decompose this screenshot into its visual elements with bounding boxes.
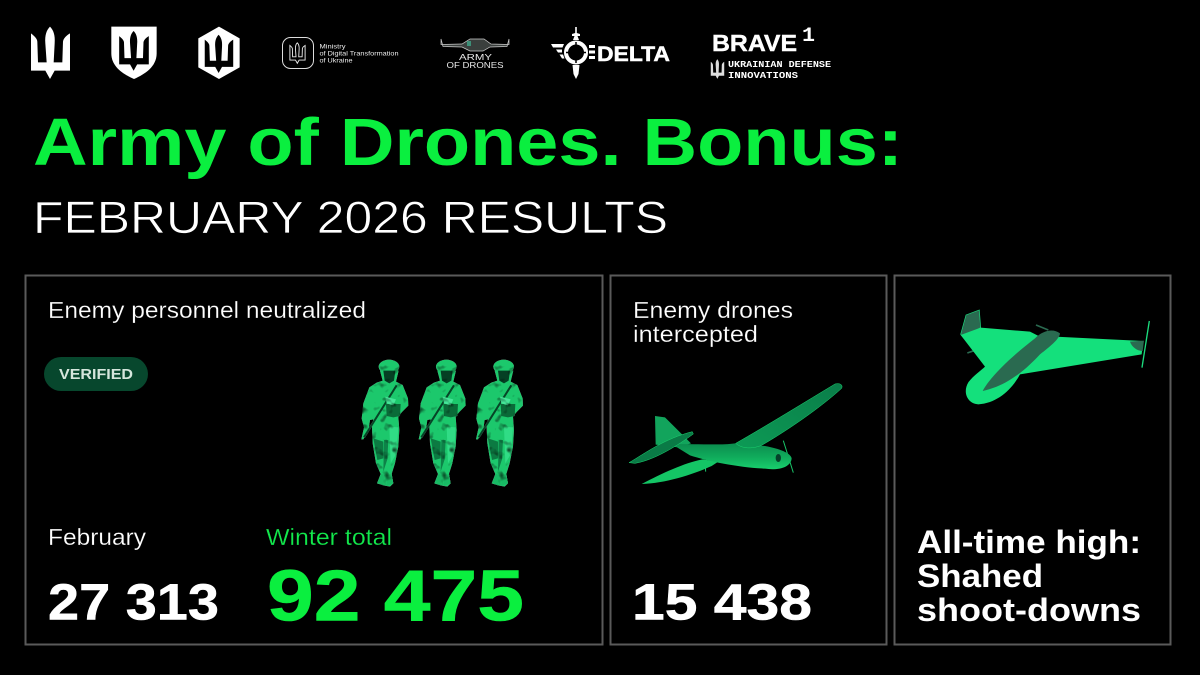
value: February: 27 313 [48,574,219,630]
heading: enemy personnel neutralized: Enemy personnel neutralized [48,297,366,323]
heading: enemy drones intercepted [633,297,793,347]
logo: Brave1: UKRAINIAN DEFENSE [728,59,831,70]
logo: Army of Drones [441,39,509,70]
logo: Brave1: BRAVE [712,30,797,56]
panel: Shahed shoot-downs [894,276,1170,644]
heading: enemy drones intercepted: intercepted [633,321,758,347]
logo: Ministry of Digital Transformation: of Digital Transformation [320,50,399,58]
logo: Brave1 [711,25,831,81]
logo: Brave1: INNOVATIONS [728,70,798,81]
callout: all-time high: All-time high: [917,524,1141,560]
illustration: Shahed drone [961,310,1149,404]
logo: Delta [551,27,670,79]
title: Army of Drones. Bonus: [33,105,903,180]
label: February: February [48,524,147,550]
logo: Delta: DELTA [597,43,670,66]
subtitle: FEBRUARY 2026 RESULTS [33,192,668,243]
panel: enemy drones [610,276,886,644]
logo: hexagon trident [198,27,240,79]
logo: Army of Drones: ARMY [459,52,492,62]
logo: Brave1: 1 [802,25,815,48]
illustration: reconnaissance drone [629,384,842,484]
badge: verified: VERIFIED [59,366,133,383]
callout: all-time high: shoot-downs [917,592,1141,628]
label: Winter total: Winter total [266,524,392,550]
logo: Ministry of Digital Transformation: of Ukraine [320,58,353,64]
heading: enemy drones intercepted: Enemy drones [633,297,793,323]
badge: verified [44,357,148,391]
logo: Army of Drones: OF DRONES [446,60,504,70]
logo: Ministry of Digital Transformation [282,38,399,68]
logo: trident [31,27,70,79]
callout: all-time high [917,524,1141,628]
value: Winter total: 92 475 [267,556,524,636]
icon: three soldiers [361,360,523,487]
logo: Ministry of Digital Transformation: Ministry [320,44,346,50]
callout: all-time high: Shahed [917,558,1043,594]
logo row [31,25,831,81]
value: drones intercepted: 15 438 [632,574,812,630]
panel: enemy personnel [26,276,602,644]
logo: shield trident [111,27,157,79]
